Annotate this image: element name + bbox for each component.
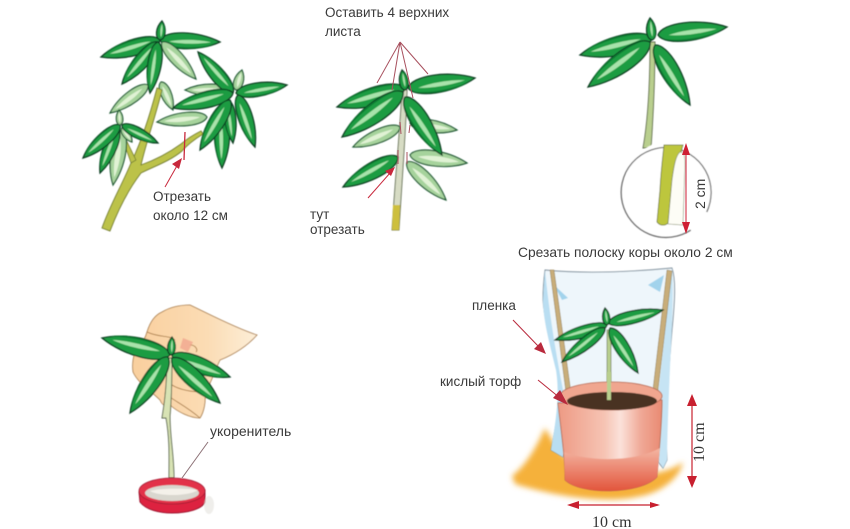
illustration: terracotta pot with peat: [558, 372, 662, 491]
arrow: pot width: [567, 501, 660, 509]
arrow: peat pointer: [538, 380, 568, 405]
caption: cut a strip of bark: Срезать полоску коры около 2 см: [518, 245, 733, 260]
illustration: branch and leaf clusters: [79, 21, 288, 231]
label: film: пленка: [472, 298, 516, 313]
panel: step 2 leave four upper leaves: [310, 5, 476, 237]
icon: orange ground stain: [512, 428, 683, 499]
label: rooting agent: укоренитель: [210, 423, 291, 439]
label: 2 cm: 2 cm: [692, 179, 708, 209]
label: cut about 12 cm: Отрезать: [153, 189, 211, 204]
panel: step 4 dip in rooting powder: [100, 305, 291, 514]
magnified detail circle: [619, 141, 715, 240]
icon: red lid with rooting powder: [139, 478, 214, 514]
panel: step 1 branch with leaves: [79, 21, 288, 231]
label: height 10 cm: 10 cm: [691, 422, 708, 462]
label: cut about 12 cm: около 12 см: [153, 208, 228, 223]
arrow: film pointer: [513, 320, 546, 354]
illustration: plastic film cover: [543, 268, 675, 468]
pointer line: rooting powder: [182, 442, 208, 478]
heading: leave 4 upper leaves: листа: [325, 24, 361, 39]
illustration: hand holding cutting: [100, 305, 257, 478]
illustration: stem with four leaves: [578, 18, 728, 148]
arrow: pot height: [687, 394, 697, 488]
arrow: cut here: [368, 167, 395, 198]
cut mark and arrow: [165, 132, 185, 187]
label: cut here: тут: [310, 207, 329, 222]
arrow: 2 cm dimension: [682, 143, 690, 234]
label: cut here: отрезать: [310, 222, 365, 237]
heading: leave 4 upper leaves: Оставить 4 верхних: [325, 5, 449, 20]
panel: step 5 pot under film: [440, 268, 708, 529]
illustration: trimmed stem with leaves: [335, 69, 476, 230]
label: acidic peat: кислый торф: [440, 374, 521, 389]
pointer lines to upper leaves: [377, 42, 428, 164]
panel: step 3 strip the bark: [518, 18, 733, 260]
